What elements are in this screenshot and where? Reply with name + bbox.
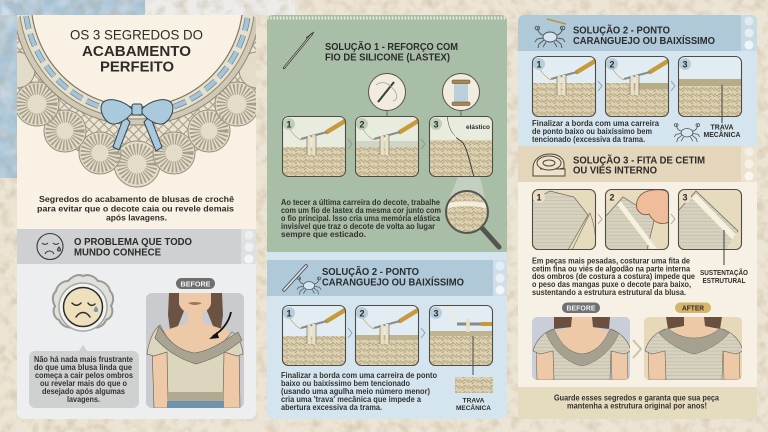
step 1: solução 1 bbox=[282, 116, 346, 177]
icon: sad face outline bbox=[37, 234, 63, 260]
arrow: before to after bbox=[633, 340, 641, 358]
callout: problem text: do que uma blusa linda que bbox=[34, 363, 133, 372]
step 3: solução 1: elástico bbox=[466, 124, 490, 131]
callout: problem text: Não há nada mais frustrante bbox=[34, 355, 133, 364]
icon: crab with hook bbox=[535, 19, 566, 48]
footer text: Guarde esses segredos e garanta que sua peça bbox=[554, 394, 719, 402]
callout: trava mecânica: MECÂNICA bbox=[456, 403, 491, 412]
step 2: ponto caranguejo: 2 bbox=[609, 60, 615, 70]
step 2: solução 1: 2 bbox=[359, 120, 365, 130]
footer text: mantenha a estrutura original por anos! bbox=[567, 402, 707, 410]
body text: ponto caranguejo bbox=[532, 119, 660, 144]
body text: solução 1: com um fio de lastex da mesma cor junto com bbox=[281, 206, 441, 215]
step 1: solução 2 bbox=[282, 305, 346, 366]
callout: trava mecânica with crab: TRAVA bbox=[710, 124, 734, 132]
heading: solução 3: OU VIÉS INTERNO bbox=[573, 164, 657, 176]
arrow bbox=[348, 328, 352, 338]
body text: solução 2: abertura excessiva da trama. bbox=[281, 403, 382, 412]
panel: intro and problem bbox=[17, 15, 256, 419]
body text: solução 3 bbox=[532, 256, 695, 297]
heading: solução 1 bbox=[325, 40, 458, 64]
callout: problem text: desejado após algumas bbox=[42, 387, 125, 396]
icon: blue bow bbox=[101, 100, 173, 151]
footer text bbox=[554, 394, 719, 410]
icon: crochet hook and crab bbox=[284, 266, 321, 294]
body text: solução 2: (usando uma agulha meio número menor) bbox=[281, 387, 430, 396]
body text: solução 1 bbox=[281, 198, 441, 239]
panel: solução 2 and solução 3 bbox=[518, 15, 757, 419]
zoom cone bbox=[449, 177, 485, 199]
heading: solução 2 (repeat) bbox=[573, 24, 715, 47]
callout: problem text: ou revelar mais do que o bbox=[40, 379, 127, 388]
intro text: Segredos do acabamento de blusas de crochê bbox=[39, 194, 234, 204]
step 3: fita sewn bbox=[678, 189, 742, 250]
heading: solução 2 bbox=[322, 265, 464, 288]
arrow bbox=[421, 139, 425, 149]
title bbox=[70, 26, 203, 76]
illustration: before blouse bbox=[532, 317, 631, 380]
icon: magnifying glass bbox=[446, 191, 499, 247]
callout: problem text: começa a cair pelos ombros bbox=[35, 371, 133, 380]
body text: solução 1: sempre que esticado. bbox=[281, 230, 366, 239]
callout: problem text: lavagens. bbox=[67, 395, 100, 404]
heading: solução 1: SOLUÇÃO 1 - REFORÇO COM bbox=[325, 40, 458, 53]
body text: solução 1: o fio principal. Isso cria uma memória elástica bbox=[281, 214, 440, 223]
callout: problem text bbox=[29, 345, 139, 408]
body text: ponto caranguejo: de ponto baixo ou baixíssimo bem bbox=[532, 127, 652, 136]
heading: solução 2: CARANGUEJO OU BAIXÍSSIMO bbox=[322, 276, 464, 288]
label: before: BEFORE bbox=[180, 280, 210, 288]
body text: solução 3: dos ombros (de costura a costura) impede que bbox=[532, 272, 695, 281]
body text: solução 1: invisível que traz o decote de volta ao lugar bbox=[281, 222, 435, 231]
icon circle: needle and thread bbox=[368, 74, 406, 145]
label: after bbox=[675, 302, 711, 313]
step 2: solução 2: 2 bbox=[359, 308, 365, 318]
step 3: fita sewn: 3 bbox=[682, 192, 688, 202]
step 1: ponto caranguejo bbox=[532, 56, 596, 117]
title: ACABAMENTO bbox=[82, 44, 191, 60]
arrow bbox=[671, 81, 675, 91]
step 3: solução 1 bbox=[429, 116, 493, 177]
heading: solução 3: SOLUÇÃO 3 - FITA DE CETIM bbox=[573, 154, 705, 166]
icon circle: thread spool bbox=[442, 74, 480, 143]
step 2: fita and hand: 2 bbox=[609, 192, 615, 202]
body text: solução 2 bbox=[281, 371, 437, 412]
step 3: ponto caranguejo: 3 bbox=[682, 60, 688, 70]
step 3: solução 2 bbox=[429, 305, 493, 366]
arrow bbox=[671, 214, 675, 224]
heading: o problema bbox=[74, 236, 192, 258]
arrow bbox=[209, 312, 231, 339]
arrow bbox=[348, 139, 352, 149]
intro text: após lavagens. bbox=[106, 212, 167, 222]
callout: trava mecânica bbox=[455, 336, 493, 412]
label: before bbox=[176, 278, 215, 289]
step 1: fita bbox=[532, 189, 596, 250]
callout: sustentação estrutural bbox=[700, 230, 748, 285]
step 3: ponto caranguejo bbox=[678, 56, 742, 117]
body text: ponto caranguejo: tencionado (excessiva da trama. bbox=[532, 135, 645, 144]
step 1: fita: 1 bbox=[536, 192, 542, 202]
intro text: para evitar que o decote caia ou revele demais bbox=[37, 204, 234, 214]
body text: solução 3: Em peças mais pesadas, costurar uma fita de bbox=[532, 256, 690, 266]
body text: solução 2: cria uma 'trava' mecânica que impede a bbox=[281, 395, 422, 404]
step 2: fita and hand bbox=[605, 189, 669, 250]
heading: solução 2 (repeat): CARANGUEJO OU BAIXÍSSIMO bbox=[573, 34, 715, 47]
illustration: woman before bbox=[146, 293, 244, 409]
heading: o problema: O PROBLEMA QUE TODO bbox=[74, 236, 192, 248]
illustration: lace collar with blue bow bbox=[17, 15, 256, 188]
callout: trava mecânica with crab: MECÂNICA bbox=[704, 130, 740, 139]
label: before: BEFORE bbox=[566, 304, 596, 312]
heading: o problema: MUNDO CONHECE bbox=[74, 246, 161, 258]
step 1: solução 1: 1 bbox=[286, 120, 292, 130]
step 3: solução 1: 3 bbox=[433, 120, 439, 130]
heading: solução 2: SOLUÇÃO 2 - PONTO bbox=[322, 265, 419, 278]
icon: needle bbox=[284, 32, 314, 68]
body text: ponto caranguejo: Finalizar a borda com uma carreira bbox=[532, 119, 660, 128]
step 3: solução 2: 3 bbox=[433, 308, 439, 318]
label: after: AFTER bbox=[682, 304, 705, 312]
body text: solução 2: baixo ou baixíssimo bem tencionado bbox=[281, 379, 410, 388]
illustration: after blouse bbox=[644, 317, 743, 380]
callout: trava mecânica with crab bbox=[674, 85, 740, 142]
step 2: solução 1 bbox=[355, 116, 419, 177]
body text: solução 3: o peso das mangas puxe o decote para baixo, bbox=[532, 280, 691, 289]
arrow bbox=[598, 81, 602, 91]
heading: solução 3 bbox=[573, 154, 705, 176]
callout: sustentação estrutural: SUSTENTAÇÃO bbox=[700, 268, 748, 277]
body text: solução 3: cetim fina ou viés de algodão na parte interna bbox=[532, 264, 690, 274]
step 1: ponto caranguejo: 1 bbox=[536, 60, 542, 70]
heading: solução 2 (repeat): SOLUÇÃO 2 - PONTO bbox=[573, 24, 670, 36]
intro text bbox=[37, 194, 234, 222]
arrow bbox=[598, 214, 602, 224]
title: OS 3 SEGREDOS DO bbox=[70, 26, 203, 42]
step 1: solução 2: 1 bbox=[286, 308, 292, 318]
callout: trava mecânica: TRAVA bbox=[462, 398, 485, 404]
icon: crying face in lace frame bbox=[53, 275, 113, 331]
body text: solução 3: sustentando a estrutura estrutural da blusa. bbox=[532, 288, 686, 297]
step 2: ponto caranguejo bbox=[605, 56, 669, 117]
panel: solução 1 and solução 2 bbox=[267, 15, 507, 419]
icon: tape roll bbox=[533, 154, 565, 176]
heading: solução 1: FIO DE SILICONE (LASTEX) bbox=[325, 52, 450, 64]
arrow bbox=[421, 328, 425, 338]
step 2: solução 2 bbox=[355, 305, 419, 366]
title: PERFEITO bbox=[100, 60, 174, 76]
callout: sustentação estrutural: ESTRUTURAL bbox=[702, 278, 746, 285]
body text: solução 2: Finalizar a borda com uma carreira de ponto bbox=[281, 371, 437, 380]
body text: solução 1: Ao tecer a última carreira do decote, trabalhe bbox=[281, 198, 441, 207]
